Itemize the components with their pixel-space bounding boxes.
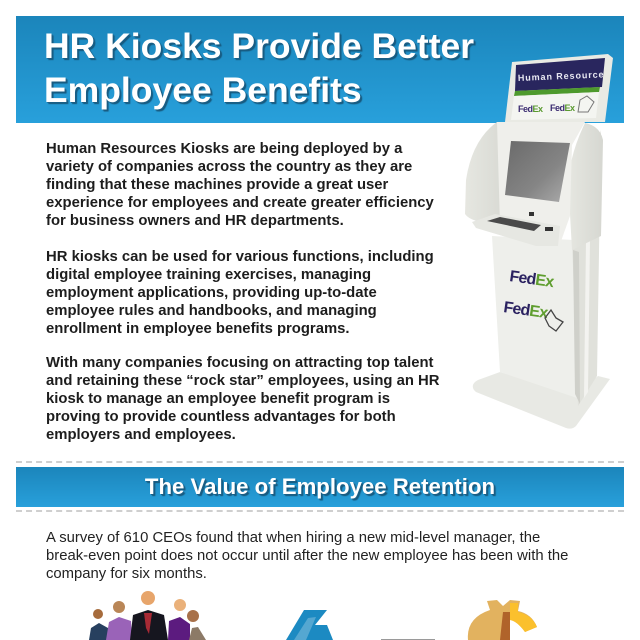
intro paragraph 3: kiosk to manage an employee benefit program is — [46, 391, 390, 407]
intro paragraph 1: Human Resources Kiosks are being deployed by a — [46, 141, 402, 157]
icon: number six — [286, 610, 333, 640]
intro paragraph 3: proving to provide countless advantages for both — [46, 409, 396, 425]
intro paragraph 3: and retaining these “rock star” employees, using an HR — [46, 373, 439, 389]
section divider bottom — [16, 510, 624, 512]
intro paragraph 3: With many companies focusing on attracting top talent — [46, 355, 433, 371]
survey text: A survey of 610 CEOs found that when hiring a new mid-level manager, the — [46, 530, 540, 546]
intro paragraph 2: employee rules and handbooks, and managing — [46, 303, 377, 319]
intro paragraph 2: HR kiosks can be used for various functions, including — [46, 249, 434, 265]
intro paragraph 2: enrollment in employee benefits programs. — [46, 321, 350, 337]
intro paragraph 2: digital employee training exercises, managing — [46, 267, 371, 283]
FedEx logos on kiosk: FedEx — [508, 268, 555, 291]
intro paragraph 1 — [46, 141, 434, 229]
title — [44, 26, 476, 112]
intro paragraph 1: variety of companies across the country as they are — [46, 159, 412, 175]
kiosk wings — [465, 122, 603, 250]
kiosk sign panel: FedEx — [518, 104, 543, 114]
survey text: break-even point does not occur until after the new employee has been with the — [46, 548, 568, 564]
intro paragraph 1: finding that these machines provide a great user — [46, 177, 388, 193]
intro paragraph 1: experience for employees and create greater efficiency — [46, 195, 434, 211]
section divider top — [16, 461, 624, 463]
kiosk sign panel: FedEx — [550, 103, 575, 113]
kiosk keyboard shelf — [472, 212, 560, 246]
intro paragraph 2 — [46, 249, 434, 337]
FedEx logos on kiosk: FedEx — [502, 299, 549, 322]
intro paragraph 3 — [46, 355, 440, 443]
survey text: company for six months. — [46, 566, 207, 582]
FedEx logos on kiosk — [502, 268, 563, 331]
section heading: The Value of Employee Retention — [145, 474, 495, 499]
icon: month calendar edge — [381, 639, 435, 640]
title: HR Kiosks Provide Better — [44, 26, 474, 66]
title: Employee Benefits — [44, 70, 362, 110]
kiosk sign panel: Human Resource — [518, 69, 605, 83]
intro paragraph 3: employers and employees. — [46, 427, 236, 443]
section banner — [16, 467, 624, 507]
icon: group of employees — [89, 591, 206, 640]
header banner — [16, 16, 624, 123]
intro paragraph 2: employment applications, providing up-to-date — [46, 285, 377, 301]
kiosk screen — [505, 141, 570, 202]
survey text — [46, 530, 568, 582]
kiosk sign panel — [505, 54, 613, 122]
intro paragraph 1: for business owners and HR departments. — [46, 213, 344, 229]
icon: gold dollar sign — [468, 600, 537, 640]
kiosk base — [473, 372, 610, 429]
kiosk column — [492, 130, 601, 406]
